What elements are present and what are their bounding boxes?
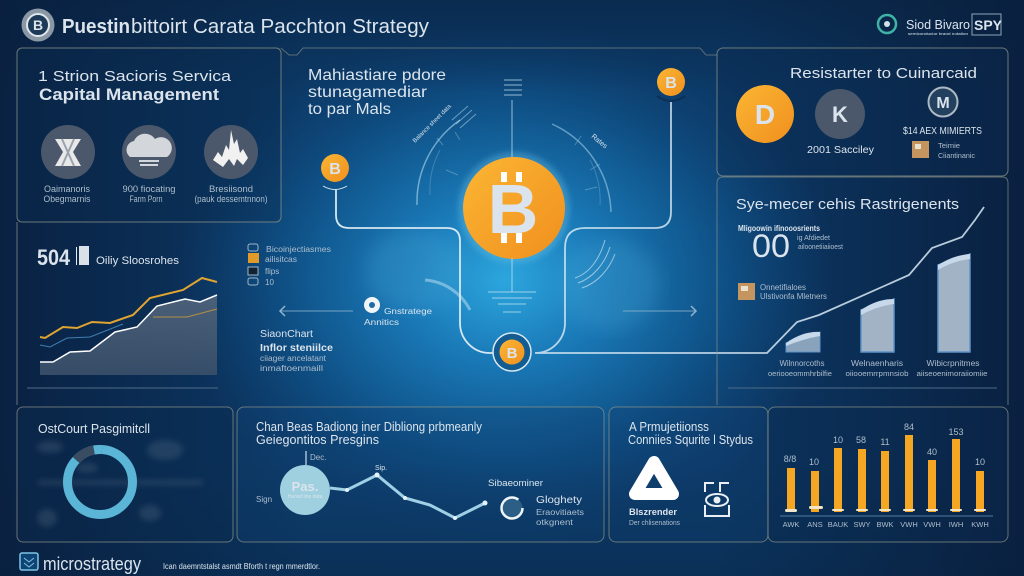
panel heading: Sye-mecer cehis Rastrigenents — [736, 196, 959, 213]
coin bottom: B — [507, 345, 518, 362]
text block: inflor: SiaonChart — [260, 329, 313, 340]
bar bases — [785, 506, 986, 512]
central bitcoin hub with arcs: Rates — [590, 133, 609, 151]
bar labels: Wibicrpnitmes — [926, 359, 980, 368]
callout circle: Hansd line data — [288, 494, 323, 500]
coin bottom — [493, 333, 531, 371]
value labels: 58 — [856, 435, 866, 445]
panel: capital management — [17, 48, 281, 222]
legend: Bicoinjectiasmes — [266, 245, 331, 254]
month labels: VWH — [900, 520, 918, 529]
icon: spikes — [204, 125, 258, 179]
legend: flips — [265, 267, 279, 276]
stat 00: Mligoowin ifinooosrients — [738, 224, 820, 233]
legend — [248, 244, 331, 287]
note: Onnetifialoes — [760, 282, 806, 292]
value labels — [784, 422, 985, 467]
icon captions: 900 fiocating — [122, 184, 176, 194]
bars — [786, 254, 970, 352]
central bitcoin hub with arcs: Balance sheet data — [412, 103, 453, 144]
month labels: ANS — [807, 520, 823, 529]
month labels: VWH — [923, 520, 941, 529]
legend: 10 — [265, 278, 274, 287]
stat heading: 504 — [37, 245, 71, 270]
coin right — [657, 68, 685, 101]
panel: requirements bars — [717, 177, 1008, 405]
arrow right — [623, 306, 696, 316]
line chart: Dec. — [310, 453, 326, 462]
M badge — [903, 88, 982, 137]
strategy badge: Gnstratege — [384, 307, 433, 316]
axis — [780, 515, 993, 517]
value labels: 10 — [809, 457, 819, 467]
coin right: B — [665, 75, 677, 92]
donut chart — [68, 449, 132, 514]
stat 00: 00 — [752, 228, 790, 264]
callout circle — [280, 465, 330, 515]
stat heading — [37, 245, 180, 270]
value labels: 40 — [927, 447, 937, 457]
value labels: 11 — [880, 437, 890, 447]
icon captions — [44, 184, 268, 204]
stat 00 — [738, 224, 843, 264]
title: Puestin — [62, 16, 130, 38]
x badge: 2001 Sacciley — [807, 145, 874, 156]
icon: x — [41, 125, 95, 179]
x badge: K — [832, 102, 848, 127]
value labels: 8/8 — [784, 454, 796, 464]
central bitcoin hub with arcs: B — [488, 170, 538, 248]
arrow left — [280, 306, 353, 316]
footer logo: microstrategy — [43, 554, 141, 574]
panel heading — [256, 420, 483, 447]
icon captions: Obegmarnis — [44, 194, 91, 204]
icon captions: (pauk dessemtnnon) — [194, 194, 268, 204]
header logo icon: B — [33, 17, 43, 33]
center heading: to par Mals — [308, 101, 391, 118]
panel heading: Chan Beas Badiong iner Dibliong prbmeanly — [256, 420, 483, 434]
center heading: stunagamediar — [308, 84, 428, 101]
panel heading: 1 Strion Sacioris Servica — [38, 68, 232, 85]
thumbnail note: Teimie — [938, 141, 960, 150]
header logo icon — [22, 8, 54, 42]
line chart — [256, 451, 488, 520]
big coin — [736, 85, 794, 143]
panel heading — [628, 420, 753, 447]
panel heading: OstCourt Pasgimitcll — [38, 421, 150, 436]
line chart: Sign — [256, 495, 272, 504]
side text: Gloghety — [536, 495, 582, 506]
icon: gears — [705, 483, 729, 516]
strategy badge: Annitics — [364, 318, 399, 327]
panel heading — [38, 68, 232, 104]
panel heading: A Prmujetiionss — [629, 420, 709, 434]
panel: bar chart — [768, 407, 1008, 542]
central bitcoin hub with arcs — [412, 80, 615, 312]
stat 00: ailoonetiiaiioest — [798, 244, 843, 251]
value labels: 84 — [904, 422, 914, 432]
month labels: SWY — [853, 520, 871, 529]
orange bars — [787, 435, 984, 512]
value labels: 10 — [833, 435, 843, 445]
panel: triangle — [609, 407, 768, 542]
text block: inflor: inmaftoenmaill — [260, 364, 323, 373]
coin left: B — [329, 161, 341, 178]
top right logo — [878, 14, 1003, 36]
panel: donut — [17, 407, 233, 542]
stat 00: ig Afdiedet — [797, 233, 831, 242]
note — [738, 282, 827, 301]
icon captions: Bresiisond — [209, 184, 253, 194]
bar labels: aiiseoenimoraiiomiie — [916, 371, 988, 378]
text block: inflor: ciiager ancelatant — [260, 354, 327, 363]
top right logo: Siod Bivaro — [906, 17, 970, 32]
icon: triangle — [635, 462, 673, 494]
month labels: KWH — [971, 520, 989, 529]
top right logo: SPY — [974, 17, 1003, 33]
text block: inflor — [260, 329, 333, 373]
connector lines — [336, 102, 984, 353]
bar labels: Welnaenharis — [851, 359, 903, 368]
side text: otkgnent — [536, 518, 574, 527]
month labels: IWH — [949, 520, 963, 529]
icon captions: Farm Porn — [130, 194, 162, 204]
line chart: Sip. — [375, 465, 387, 472]
panel: chain line — [237, 407, 604, 542]
top right logo: semiconductor brand notation — [908, 31, 968, 36]
footer note: Ican daemntstalst asmdt Bforth t regn mmerdtlor. — [163, 562, 320, 571]
strategy badge — [364, 297, 433, 327]
icon: cloud — [122, 125, 176, 179]
note: Ulstivonfa Mletners — [760, 291, 827, 301]
faded map shapes — [37, 440, 203, 527]
panel heading: Resistarter to Cuinarcaid — [790, 65, 977, 82]
caption: Der chlisenations — [629, 518, 680, 527]
ring icon — [488, 478, 543, 518]
panel: registers — [717, 48, 1008, 176]
coin left — [321, 154, 349, 190]
text block: inflor: Inflor steniilce — [260, 343, 333, 354]
x badge — [807, 89, 874, 156]
caption — [629, 507, 680, 527]
panel: left chart frame — [16, 222, 18, 405]
value labels: 153 — [948, 427, 964, 437]
bar labels: oeriooeommhrbilfie — [768, 371, 832, 378]
stat heading: Oiliy Sloosrohes — [96, 255, 180, 267]
bar labels: oiiooemrrpmnsiob — [846, 371, 909, 378]
bar labels — [768, 359, 988, 378]
thumbnail note — [912, 141, 975, 160]
callout circle: Pas. — [292, 479, 318, 494]
ring icon: Sibaeominer — [488, 478, 543, 488]
icon captions: Oaimanoris — [44, 184, 90, 194]
center heading: Mahiastiare pdore — [308, 67, 446, 84]
M badge: $14 AEX MIMIERTS — [903, 126, 982, 137]
legend: ailisitcas — [265, 255, 297, 264]
center heading — [308, 67, 446, 118]
thumbnail note: Ciiantinanic — [938, 151, 975, 160]
M badge: M — [936, 95, 950, 112]
bar labels: Wilnnorcoths — [780, 359, 824, 368]
month labels: AWK — [783, 520, 799, 529]
line chart — [27, 278, 218, 388]
value labels: 10 — [975, 457, 985, 467]
month labels: BAUK — [828, 520, 848, 529]
caption: Blszrender — [629, 507, 677, 517]
panel heading: Geiegontitos Presgins — [256, 433, 379, 447]
month labels — [783, 520, 989, 529]
side text — [536, 495, 584, 527]
center frame top line — [281, 48, 717, 55]
big coin: D — [755, 99, 775, 130]
panel heading: Conniies Squrite l Stydus — [628, 433, 753, 447]
title: bittoirt Carata Pacchton Strategy — [131, 16, 429, 38]
side text: Eraovitiaets — [536, 508, 584, 517]
panel heading: Capital Management — [39, 86, 220, 104]
month labels: BWK — [876, 520, 894, 529]
